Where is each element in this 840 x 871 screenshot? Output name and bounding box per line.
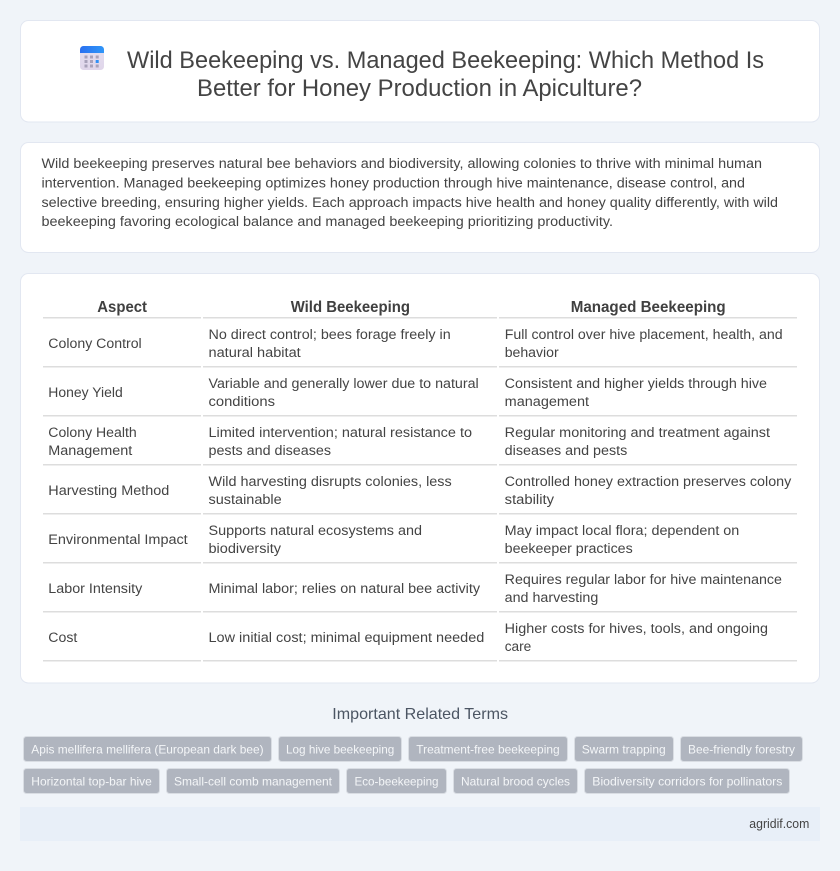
row: colony control: Colony Control <box>48 336 142 352</box>
row: harvesting method: stability <box>505 492 555 508</box>
row: cost: care <box>505 639 531 655</box>
row: honey yield: Honey Yield <box>48 385 123 401</box>
table header row <box>97 299 726 316</box>
row: environmental impact: Environmental Impact <box>48 532 188 548</box>
row: labor intensity: and harvesting <box>505 590 598 606</box>
panel: description <box>20 142 820 252</box>
related term tags: Natural brood cycles <box>461 774 570 788</box>
row: colony health management: Limited intervention; natural resistance to <box>208 425 472 441</box>
footer bar: agridif.com <box>749 817 809 831</box>
row: colony health management: pests and diseases <box>208 443 331 459</box>
row: honey yield: Consistent and higher yields through hive <box>505 376 767 392</box>
row: environmental impact: Supports natural ecosystems and <box>208 523 422 539</box>
row: colony control <box>48 327 783 361</box>
row: harvesting method: Wild harvesting disrupts colonies, less <box>208 474 452 490</box>
related term tags: Treatment-free beekeeping <box>416 742 560 756</box>
row: colony control: behavior <box>505 345 559 361</box>
row: colony control: Full control over hive placement, health, and <box>505 327 783 343</box>
row: honey yield <box>48 376 767 410</box>
table header row: Managed Beekeeping <box>571 299 726 316</box>
row: environmental impact: beekeeper practices <box>505 541 633 557</box>
row: cost <box>48 621 768 655</box>
description text: beekeeping favoring ecological balance and managed beekeeping prioritizing productivity. <box>42 214 613 230</box>
row: environmental impact: May impact local flora; dependent on <box>505 523 739 539</box>
heading: important related terms: Important Related Terms <box>332 706 508 723</box>
related term tags: Eco-beekeeping <box>354 774 438 788</box>
related term tags: Swarm trapping <box>582 742 666 756</box>
row: labor intensity: Labor Intensity <box>48 581 143 597</box>
related term tags: Bee-friendly forestry <box>688 742 795 756</box>
row: cost: Cost <box>48 630 77 646</box>
row: harvesting method: sustainable <box>208 492 282 508</box>
row: colony health management: Regular monitoring and treatment against <box>505 425 770 441</box>
panel: comparison table <box>20 274 820 683</box>
row: labor intensity: Minimal labor; relies on natural bee activity <box>208 581 481 597</box>
row: harvesting method: Harvesting Method <box>48 483 169 499</box>
row: colony health management <box>48 425 770 459</box>
related term tags: Horizontal top-bar hive <box>31 774 152 788</box>
row: honey yield: conditions <box>208 394 275 410</box>
row: colony control: No direct control; bees forage freely in <box>208 327 451 343</box>
row: cost: Low initial cost; minimal equipment needed <box>208 630 484 646</box>
title: Wild Beekeeping vs. Managed Beekeeping: Which Method Is <box>127 47 764 74</box>
row: colony health management: Management <box>48 443 132 459</box>
related term tags: Biodiversity corridors for pollinators <box>592 774 782 788</box>
row: colony health management: Colony Health <box>48 425 137 441</box>
header panel <box>20 20 820 122</box>
related term tags: Apis mellifera mellifera (European dark bee) <box>31 742 264 756</box>
row: harvesting method: Controlled honey extraction preserves colony <box>505 474 792 490</box>
description text <box>42 156 778 230</box>
title <box>127 47 764 102</box>
row: colony health management: diseases and pests <box>505 443 627 459</box>
table header row: Wild Beekeeping <box>291 299 410 316</box>
description text: selective breeding, ensuring higher yields. Each approach impacts hive health and honey quality differently, with wild <box>42 195 778 211</box>
row: environmental impact <box>48 523 739 557</box>
row: harvesting method <box>48 474 792 508</box>
title: Better for Honey Production in Apiculture? <box>197 75 642 102</box>
row: labor intensity <box>48 572 782 606</box>
row: colony control: natural habitat <box>208 345 301 361</box>
related term tags: Small-cell comb management <box>174 774 333 788</box>
row: labor intensity: Requires regular labor for hive maintenance <box>505 572 782 588</box>
row: honey yield: management <box>505 394 589 410</box>
description text: intervention. Managed beekeeping optimizes honey production through hive maintenance, disease control, and <box>42 176 745 192</box>
related term tags <box>24 736 802 794</box>
related term tags: Log hive beekeeping <box>286 742 394 756</box>
row: environmental impact: biodiversity <box>208 541 282 557</box>
row: cost: Higher costs for hives, tools, and ongoing <box>505 621 768 637</box>
icon: calendar grid <box>80 46 104 70</box>
description text: Wild beekeeping preserves natural bee behaviors and biodiversity, allowing colonies to thrive with minimal human <box>42 156 762 172</box>
table header row: Aspect <box>97 299 148 316</box>
footer bar <box>20 807 820 841</box>
row: honey yield: Variable and generally lower due to natural <box>208 376 479 392</box>
